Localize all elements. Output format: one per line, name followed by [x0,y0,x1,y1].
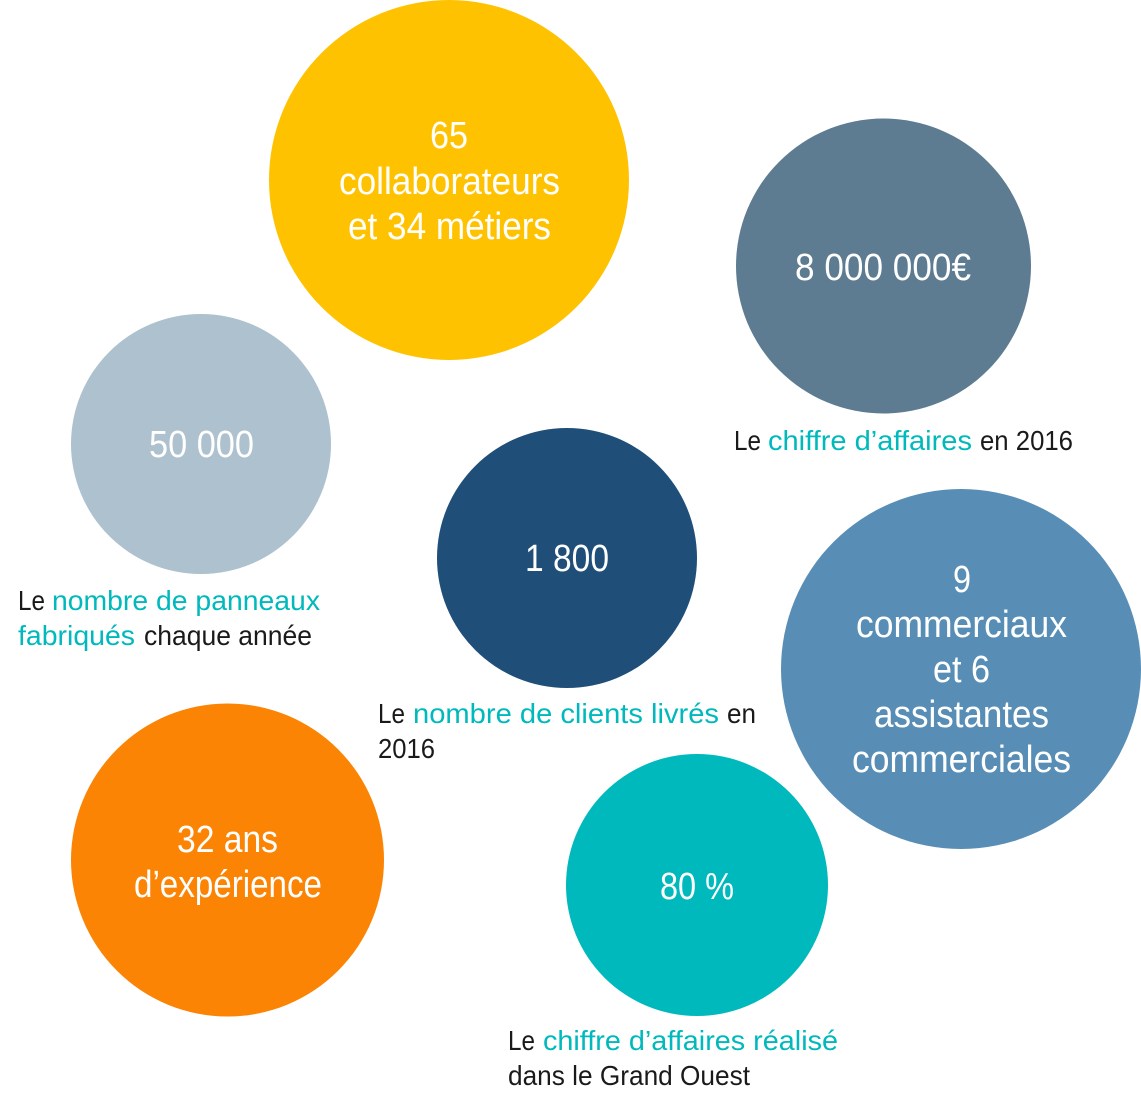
caption: chiffre d'affaires 2016: Le [734,425,761,456]
bubble: chiffre d'affaires amount: 8 000 000€ [795,247,971,289]
bubble: commerciaux et assistantes: et 6 [933,649,990,691]
bubble: 80 % [566,754,828,1016]
caption: nombre de clients: en [727,698,756,729]
caption: nombre de panneaux: nombre de panneaux [52,585,320,616]
caption: chiffre d'affaires Grand Ouest: dans le Grand Ouest [508,1060,750,1091]
caption: chiffre d'affaires Grand Ouest [508,1025,838,1091]
caption: chiffre d'affaires 2016: en 2016 [980,425,1073,456]
bubble: commerciaux et assistantes: commerciales [852,739,1071,781]
caption: nombre de clients [378,698,756,764]
bubble: 32 ans d'expérience: d’expérience [134,864,322,906]
caption: nombre de clients: 2016 [378,733,435,764]
bubble: 65 collaborateurs: et 34 métiers [348,206,551,248]
caption: chiffre d'affaires 2016: chiffre d’affaires [768,425,972,456]
caption: chiffre d'affaires Grand Ouest: chiffre d’affaires réalisé [543,1025,838,1056]
bubble: 1 800 clients: 1 800 [525,538,609,580]
bubble: commerciaux et assistantes: commerciaux [856,604,1067,646]
caption: nombre de panneaux: chaque année [144,620,312,651]
caption: chiffre d'affaires 2016 [734,425,1073,456]
bubble: 65 collaborateurs [269,0,629,360]
bubble: 32 ans d'expérience [71,704,384,1016]
caption: nombre de panneaux [18,585,320,651]
caption: nombre de panneaux: fabriqués [18,620,135,651]
caption: nombre de clients: nombre de clients livrés [413,698,719,729]
bubble: 50 000 panneaux: 50 000 [149,424,254,466]
bubble: 32 ans d'expérience: 32 ans [177,819,278,861]
bubble: 65 collaborateurs: 65 [430,115,468,157]
bubble: commerciaux et assistantes [781,489,1141,849]
bubble: 1 800 clients [437,428,697,688]
bubble: commerciaux et assistantes: assistantes [874,694,1049,736]
bubble: commerciaux et assistantes: 9 [953,559,971,601]
bubble: 80 %: 80 % [660,866,734,908]
bubble: 50 000 panneaux [71,314,331,574]
caption: nombre de panneaux: Le [18,585,45,616]
caption: chiffre d'affaires Grand Ouest: Le [508,1025,535,1056]
bubble: 65 collaborateurs: collaborateurs [339,161,560,203]
caption: nombre de clients: Le [378,698,405,729]
bubble: chiffre d'affaires amount [736,118,1031,414]
